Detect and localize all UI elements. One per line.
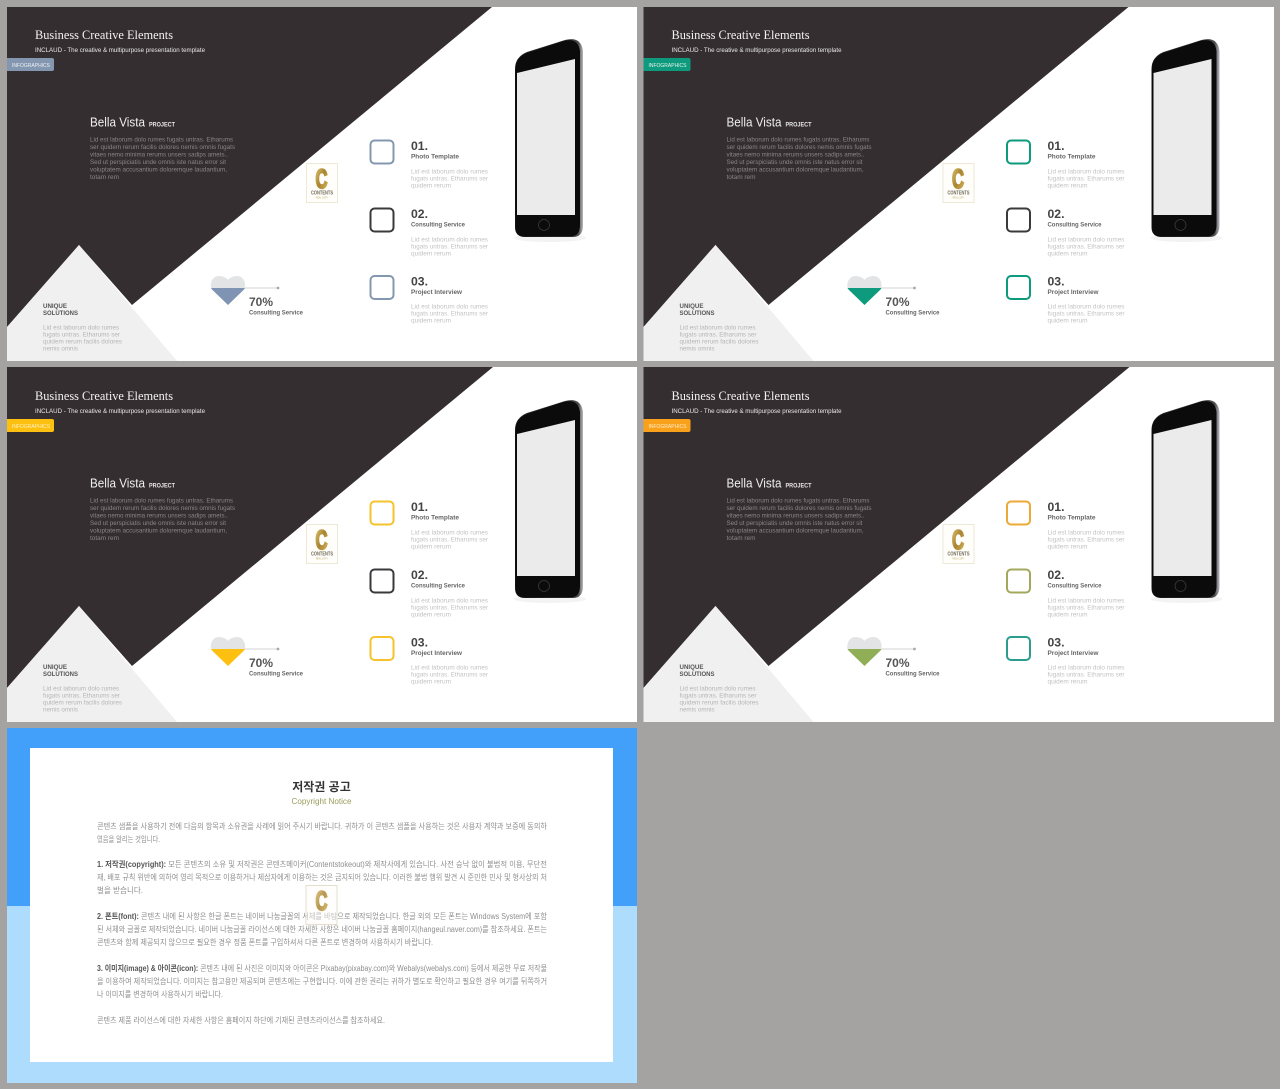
project description: totam rem (726, 536, 756, 542)
item 01 (370, 140, 488, 190)
unique solutions heading (43, 304, 78, 317)
tag: infographics (7, 58, 54, 71)
project description: ser quidem rerum facilis dolores nemis omnis fugats (90, 145, 235, 151)
heart gauge 70% (847, 276, 940, 316)
subtitle: INCLAUD - The creative & multipurpose presentation template (672, 409, 842, 415)
unique solutions text (43, 686, 122, 714)
logo watermark: C (952, 164, 964, 194)
logo watermark: CONTENTS (948, 552, 970, 558)
item 03: Project Interview (1048, 651, 1099, 657)
unique solutions text: fugats untras. Etharums ser (43, 694, 120, 700)
logo watermark: CONTENTS (311, 552, 334, 558)
project description: totam rem (90, 536, 119, 542)
logo watermark: REAL COPY (952, 558, 965, 560)
section 1: copyright (97, 859, 547, 895)
project description (726, 138, 872, 181)
project description: voluptatem accusantium doloremque laudantium, (726, 528, 864, 534)
item 01: 01. (411, 141, 428, 153)
item 01 (1007, 140, 1124, 190)
copyright subheading: Copyright Notice (292, 797, 352, 806)
title: Business Creative Elements (35, 388, 173, 403)
dark diagonal background (644, 367, 1130, 688)
intro paragraph: 였음을 알리는 것입니다. (97, 834, 160, 844)
heart gauge 70%: 70% (886, 295, 910, 309)
panel: slide 3 yellow (7, 367, 637, 722)
logo watermark: CONTENTS (311, 190, 334, 196)
project description (90, 138, 235, 181)
item 01: quidem rerum (411, 544, 451, 550)
unique solutions heading: SOLUTIONS (680, 672, 714, 678)
project heading: PROJECT (149, 484, 175, 490)
item 02: 02. (1048, 570, 1064, 582)
item 03: Lid est laborum dolo rumes (1048, 666, 1124, 672)
project description: Lid est laborum dolo rumes fugats untras. Etharums (726, 498, 870, 504)
unique solutions heading: SOLUTIONS (680, 311, 714, 317)
unique solutions heading: UNIQUE (680, 304, 704, 310)
item 03: Lid est laborum dolo rumes (411, 304, 488, 310)
item 02: quidem rerum (411, 612, 451, 618)
phone mockup (1150, 39, 1222, 242)
project description: vitaes nemo minima rerums unsers sadips amets.. (90, 152, 228, 158)
item 03: quidem rerum (1048, 680, 1088, 686)
item 01: quidem rerum (1048, 544, 1088, 550)
item 03: 03. (1048, 276, 1064, 288)
item 02: fugats untras. Etharums ser (1048, 606, 1124, 612)
unique solutions text (680, 326, 758, 352)
project description: ser quidem rerum facilis dolores nemis omnis fugats (90, 506, 235, 512)
project description: voluptatem accusantium doloremque laudantium, (90, 168, 227, 174)
project heading: PROJECT (786, 122, 812, 128)
unique solutions text: quidem rerum facilis dolores (43, 700, 122, 706)
unique solutions text: fugats untras. Etharums ser (680, 694, 756, 700)
item 02: fugats untras. Etharums ser (1048, 244, 1124, 250)
unique solutions text: Lid est laborum dolo rumes (43, 326, 119, 332)
title: Business Creative Elements (672, 27, 810, 42)
section 3: image and icon (97, 963, 547, 999)
subtitle: INCLAUD - The creative & multipurpose presentation template (35, 409, 206, 415)
item 02: fugats untras. Etharums ser (411, 606, 488, 612)
unique solutions text (43, 326, 122, 352)
light triangle (644, 245, 814, 361)
tag: infographics: INFOGRAPHICS (12, 63, 50, 69)
logo watermark: REAL COPY (316, 196, 328, 200)
tag: infographics (644, 419, 690, 432)
section 3: image and icon: 3. 이미지(image) & 아이콘(icon): 콘텐츠 내에 된 사진은 이미지와 아이콘은 Pixabay(pixabay.com)와 Webalys(webalys.com) 등에서 제공한 무료 저작물 (97, 963, 547, 973)
tag: infographics (644, 58, 690, 71)
item 03: Project Interview (1048, 290, 1099, 296)
unique solutions text: quidem rerum facilis dolores (43, 340, 122, 346)
unique solutions text: nemis omnis (43, 346, 78, 352)
item 02: Consulting Service (411, 222, 466, 228)
section 3: image and icon: 나 이미지를 변경하여 사용하시기 바랍니다. (97, 989, 223, 999)
item 03: Project Interview (411, 290, 462, 296)
section 1: copyright: 벌을 받습니다. (97, 885, 143, 895)
item 03 (370, 276, 488, 324)
intro paragraph (97, 821, 548, 844)
section 2: font: 콘텐츠와 함께 제공되지 않으므로 필요한 경우 정품 폰트를 구입하셔서 다른 폰트로 변경하여 사용하시기 바랍니다. (97, 937, 433, 947)
section 1: copyright: 1. 저작권(copyright): 모든 콘텐츠의 소유 및 저작권은 콘텐츠메이커(Contentstokeout)와 제작사에게 있습니다. 사전 승낙 없이 불법적 이용, 무단전 (97, 859, 547, 869)
section 1: copyright: 재, 배포 규칙 위반에 의하여 영리 목적으로 이용하거나 제삼자에게 이용하는 것은 금지되어 있습니다. 이러한 불법 행위 발견 시 준민한 민사 및 형사상의 처 (97, 872, 547, 882)
item 02: quidem rerum (411, 252, 451, 258)
tag: infographics: INFOGRAPHICS (648, 424, 687, 430)
unique solutions heading: UNIQUE (43, 665, 67, 671)
unique solutions text: fugats untras. Etharums ser (680, 332, 756, 338)
unique solutions heading (680, 304, 714, 317)
project description: ser quidem rerum facilis dolores nemis omnis fugats (726, 145, 872, 151)
section 2: font (97, 911, 548, 947)
unique solutions text: nemis omnis (680, 346, 714, 352)
light triangle (644, 606, 814, 722)
project description: Lid est laborum dolo rumes fugats untras. Etharums (90, 498, 233, 504)
logo watermark: C (316, 886, 328, 916)
item 02: quidem rerum (1048, 252, 1088, 258)
title: Business Creative Elements (35, 27, 173, 42)
item 03: fugats untras. Etharums ser (411, 312, 488, 318)
item 01 (1007, 502, 1124, 550)
heart gauge 70%: 70% (886, 656, 910, 670)
light triangle (7, 606, 177, 722)
item 01: Photo Template (1048, 516, 1096, 522)
logo watermark (306, 164, 338, 202)
unique solutions text: quidem rerum facilis dolores (680, 340, 758, 346)
heart gauge 70%: Consulting Service (249, 672, 304, 678)
item 03: fugats untras. Etharums ser (411, 672, 488, 678)
logo watermark (943, 164, 974, 202)
heart gauge 70% (847, 637, 940, 678)
section 2: font: 2. 폰트(font): 콘텐츠 내에 된 사항은 한글 폰트는 네이버 나눔글꼴의 서체를 바탕으로 제작되었습니다. 한글 외의 모든 폰트는 Windows System에 포함 (97, 911, 548, 921)
project heading (726, 476, 812, 490)
item 02 (370, 570, 488, 618)
logo watermark (306, 886, 337, 924)
item 03 (1007, 276, 1124, 324)
panel: slide 1 blue-gray (7, 7, 637, 361)
project description: vitaes nemo minima rerums unsers sadips amets.. (90, 514, 228, 520)
project description: Sed ut perspiciatis unde omnis iste natus error sit (726, 160, 863, 166)
logo watermark (943, 524, 974, 564)
project description: vitaes nemo minima rerums unsers sadips amets.. (726, 514, 865, 520)
dark diagonal background (644, 7, 1128, 327)
project heading: Bella Vista (726, 476, 782, 490)
unique solutions text: Lid est laborum dolo rumes (680, 326, 756, 332)
project description: voluptatem accusantium doloremque laudantium, (90, 528, 227, 534)
item 01: Photo Template (1048, 154, 1096, 160)
item 02: Consulting Service (1048, 222, 1102, 228)
project description (90, 498, 235, 542)
item 01: 01. (1048, 502, 1064, 514)
intro paragraph: 콘텐츠 샘플을 사용하기 전에 다음의 항목과 소유권을 사례에 읽어 주시기 바랍니다. 귀하가 이 콘텐츠 샘플을 사용하는 것은 사용자 계약과 보증에 동의하 (97, 821, 548, 831)
logo watermark (306, 524, 338, 564)
panel: slide 2 teal (644, 7, 1274, 361)
project heading: Bella Vista (90, 476, 145, 490)
item 02: 02. (411, 209, 428, 221)
project description: ser quidem rerum facilis dolores nemis omnis fugats (726, 506, 872, 512)
unique solutions heading: UNIQUE (43, 304, 67, 310)
project heading (90, 116, 175, 130)
item 02: Lid est laborum dolo rumes (1048, 598, 1124, 604)
item 02: fugats untras. Etharums ser (411, 244, 488, 250)
tag: infographics: INFOGRAPHICS (12, 424, 50, 430)
panel: slide 4 orange (644, 367, 1274, 722)
project heading: Bella Vista (726, 116, 782, 130)
unique solutions heading: SOLUTIONS (43, 311, 78, 317)
project heading (90, 476, 175, 490)
dark diagonal background (7, 367, 493, 688)
section 2: font: 된 서체와 글꼴로 제작되었습니다. 네이버 나눔글꼴 라이선스에 대한 자세한 사항은 네이버 나눔글꼴 홈페이지(hangeul.naver.com)를 참조하세요. 폰트는 (97, 924, 547, 934)
item 03: 03. (411, 638, 428, 650)
unique solutions heading: UNIQUE (680, 665, 704, 671)
subtitle: INCLAUD - The creative & multipurpose presentation template (35, 48, 206, 54)
item 02: Consulting Service (1048, 584, 1102, 590)
phone mockup (514, 39, 586, 242)
heart gauge 70% (211, 276, 304, 316)
item 01: Lid est laborum dolo rumes (411, 170, 488, 176)
tag: infographics (7, 419, 54, 432)
item 01: 01. (411, 502, 428, 514)
dark diagonal background (7, 7, 492, 327)
logo watermark: REAL COPY (316, 558, 328, 560)
item 03: Lid est laborum dolo rumes (1048, 304, 1124, 310)
section 3: image and icon: 을 이용하여 제작되었습니다. 이미지는 참고용만 제공되며 콘텐츠에는 구현합니다. 이에 관한 권리는 귀하가 별도로 확인하고 필요한 경우 여기를 뒤쪽하거 (97, 976, 547, 986)
project heading: PROJECT (149, 122, 175, 128)
item 01: quidem rerum (1048, 184, 1088, 190)
item 03 (1007, 637, 1124, 686)
item 02 (370, 208, 488, 258)
project description: voluptatem accusantium doloremque laudantium, (726, 168, 864, 174)
logo watermark: C (952, 525, 964, 555)
project description (726, 498, 872, 542)
item 02 (1007, 570, 1124, 618)
item 02: Lid est laborum dolo rumes (411, 598, 488, 604)
panel: copyright notice (7, 728, 637, 1083)
item 01 (370, 502, 488, 550)
unique solutions text: quidem rerum facilis dolores (680, 700, 758, 706)
unique solutions text: nemis omnis (680, 708, 714, 714)
item 03: 03. (1048, 638, 1064, 650)
item 03: Project Interview (411, 651, 462, 657)
item 02: Consulting Service (411, 584, 466, 590)
logo watermark: REAL COPY (952, 196, 965, 200)
item 03: fugats untras. Etharums ser (1048, 312, 1124, 318)
item 02: 02. (411, 570, 428, 582)
item 01: Photo Template (411, 516, 460, 522)
project heading: Bella Vista (90, 116, 145, 130)
project description: totam rem (726, 175, 756, 181)
item 01: 01. (1048, 141, 1064, 153)
project description: vitaes nemo minima rerums unsers sadips amets.. (726, 152, 865, 158)
heart gauge 70%: 70% (249, 656, 273, 670)
item 01: Lid est laborum dolo rumes (1048, 530, 1124, 536)
unique solutions text: nemis omnis (43, 708, 78, 714)
closing note: 콘텐츠 제품 라이선스에 대한 자세한 사항은 홈페이지 하단에 기재된 콘텐츠라이선스를 참조하세요. (97, 1015, 385, 1025)
unique solutions heading (680, 665, 714, 678)
item 01: Lid est laborum dolo rumes (411, 530, 488, 536)
tag: infographics: INFOGRAPHICS (648, 63, 687, 69)
item 01: fugats untras. Etharums ser (1048, 176, 1124, 182)
logo watermark: CONTENTS (948, 190, 970, 196)
item 01: fugats untras. Etharums ser (411, 176, 488, 182)
item 03 (370, 637, 488, 686)
logo watermark: C (316, 164, 328, 194)
title: Business Creative Elements (672, 388, 810, 403)
unique solutions text (680, 686, 758, 714)
subtitle: INCLAUD - The creative & multipurpose presentation template (672, 48, 842, 54)
item 03: Lid est laborum dolo rumes (411, 666, 488, 672)
item 02: Lid est laborum dolo rumes (1048, 238, 1124, 244)
heart gauge 70%: Consulting Service (886, 672, 940, 678)
item 01: fugats untras. Etharums ser (411, 538, 488, 544)
project description: Sed ut perspiciatis unde omnis iste natus error sit (726, 521, 863, 527)
project description: Lid est laborum dolo rumes fugats untras. Etharums (726, 138, 870, 144)
heart gauge 70%: Consulting Service (249, 310, 304, 316)
unique solutions text: Lid est laborum dolo rumes (680, 686, 756, 692)
item 02: quidem rerum (1048, 612, 1088, 618)
item 03: quidem rerum (411, 318, 451, 324)
phone mockup (514, 400, 586, 603)
unique solutions text: Lid est laborum dolo rumes (43, 686, 119, 692)
project description: Lid est laborum dolo rumes fugats untras. Etharums (90, 138, 233, 144)
unique solutions text: fugats untras. Etharums ser (43, 332, 120, 338)
project description: totam rem (90, 175, 119, 181)
item 02: Lid est laborum dolo rumes (411, 238, 488, 244)
unique solutions heading: SOLUTIONS (43, 672, 78, 678)
phone mockup (1150, 400, 1222, 603)
project description: Sed ut perspiciatis unde omnis iste natus error sit (90, 160, 226, 166)
item 02 (1007, 208, 1124, 258)
light triangle (7, 245, 177, 361)
item 03: quidem rerum (411, 680, 451, 686)
project description: Sed ut perspiciatis unde omnis iste natus error sit (90, 521, 226, 527)
project heading (726, 116, 812, 130)
project heading: PROJECT (786, 484, 812, 490)
item 03: fugats untras. Etharums ser (1048, 672, 1124, 678)
heart gauge 70% (211, 637, 304, 678)
item 01: fugats untras. Etharums ser (1048, 538, 1124, 544)
item 01: quidem rerum (411, 184, 451, 190)
item 01: Photo Template (411, 154, 460, 160)
copyright heading: 저작권 공고 (292, 779, 351, 794)
logo watermark: C (316, 525, 328, 555)
item 01: Lid est laborum dolo rumes (1048, 170, 1124, 176)
item 03: quidem rerum (1048, 318, 1088, 324)
item 02: 02. (1048, 209, 1064, 221)
unique solutions heading (43, 665, 78, 678)
heart gauge 70%: Consulting Service (886, 310, 940, 316)
heart gauge 70%: 70% (249, 295, 273, 309)
item 03: 03. (411, 276, 428, 288)
